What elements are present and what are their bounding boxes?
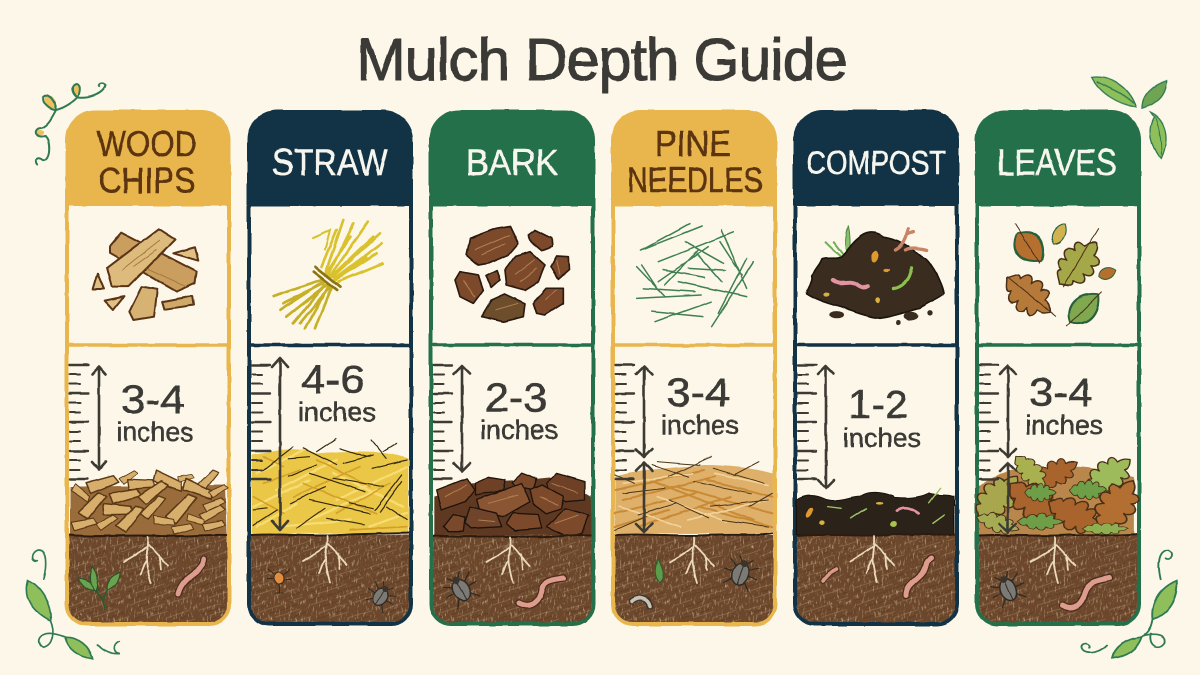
header: wood chips: CHIPS — [98, 160, 196, 201]
panel frame — [613, 130, 775, 624]
panel: straw — [247, 110, 413, 624]
decoration: top-right leaves — [1092, 77, 1167, 158]
arrow: depth 3-4 inches — [92, 366, 106, 470]
depth label: inches — [480, 415, 558, 445]
depth label — [298, 358, 376, 427]
mulch: bark layer — [434, 473, 591, 537]
soil: wood chips — [69, 535, 227, 622]
soil: pine needles — [615, 535, 773, 622]
icon: bark pieces — [455, 226, 569, 322]
soil: straw — [251, 535, 409, 622]
ruler — [616, 365, 634, 479]
header: pine needles: PINE — [655, 123, 731, 164]
icon: grey grub — [632, 598, 650, 606]
header: compost — [793, 110, 959, 206]
mulch: wood chips layer — [69, 466, 229, 535]
depth label — [661, 371, 739, 440]
decoration: top-left vine — [35, 83, 105, 165]
header: straw — [247, 110, 413, 206]
ruler — [798, 365, 816, 479]
icon: pale beetle — [362, 577, 401, 615]
header: wood chips — [65, 110, 231, 206]
panel: pine needles — [611, 110, 777, 624]
decoration: bottom-right vine — [1081, 550, 1177, 658]
panel frame — [977, 130, 1139, 624]
decoration: bottom-left vine — [27, 550, 120, 658]
ruler — [980, 365, 998, 479]
icon: beetle — [720, 552, 762, 593]
icon: earthworm — [906, 558, 931, 596]
icon: small worm — [823, 569, 837, 581]
panel: wood chips — [65, 110, 231, 624]
mulch: straw layer — [252, 439, 408, 533]
depth label: inches — [843, 423, 921, 453]
panel: bark — [429, 110, 595, 624]
panel frame — [67, 130, 229, 624]
depth label: 3-4 — [666, 371, 730, 415]
icon: earthworm — [519, 578, 563, 605]
mulch: pine needles layer — [615, 457, 773, 533]
arrow: mulch layer depth — [1000, 463, 1016, 532]
header: pine needles — [611, 110, 777, 206]
icon: earthworm — [1063, 578, 1109, 607]
ruler — [434, 365, 452, 479]
arrow: mulch layer depth — [636, 463, 652, 532]
ruler — [70, 365, 88, 479]
mulch: leaves layer — [965, 448, 1150, 542]
panel: compost — [793, 110, 959, 624]
icon: beetle — [438, 567, 483, 610]
header: leaves — [975, 110, 1141, 206]
icon: earthworm — [178, 559, 204, 594]
depth label: inches — [661, 410, 739, 440]
header: wood chips: WOOD — [97, 123, 197, 164]
depth label: 3-4 — [1029, 371, 1093, 415]
depth label: 2-3 — [485, 376, 547, 420]
depth label: inches — [298, 397, 376, 427]
soil: leaves — [979, 535, 1137, 622]
arrow: depth 2-3 inches — [454, 366, 470, 471]
header: bark — [429, 110, 595, 206]
header: pine needles: NEEDLES — [627, 161, 763, 200]
mulch: compost layer — [796, 488, 954, 535]
depth label — [480, 376, 558, 445]
arrow: upper depth — [1000, 366, 1016, 457]
icon: straw bundle — [273, 220, 383, 328]
panel frame — [431, 130, 593, 624]
panel frame — [249, 130, 411, 624]
icon: assorted leaves — [995, 221, 1118, 331]
header: bark: BARK — [466, 142, 558, 183]
icon: compost heap — [807, 225, 944, 325]
depth label: 4-6 — [301, 358, 365, 402]
depth label: 1-2 — [848, 383, 908, 427]
arrow: depth 4-6 inches — [272, 358, 288, 530]
title: Mulch Depth Guide — [356, 27, 848, 93]
panel: leaves — [965, 110, 1150, 624]
header: straw: STRAW — [272, 142, 388, 183]
depth label — [116, 378, 194, 447]
icon: wood chips — [93, 229, 198, 320]
header: leaves: LEAVES — [997, 142, 1117, 183]
depth label — [1025, 371, 1103, 440]
depth label — [843, 383, 921, 453]
panel frame — [795, 130, 957, 624]
arrow: upper depth — [636, 366, 652, 457]
icon: soil seedling — [78, 567, 120, 610]
depth label: inches — [1025, 410, 1103, 440]
icon: beetle — [986, 567, 1030, 610]
header: compost: COMPOST — [806, 144, 946, 181]
icon: pine needles — [637, 223, 753, 327]
soil: bark — [433, 535, 591, 622]
soil: compost — [797, 535, 955, 622]
icon: soil sprout — [655, 559, 663, 583]
depth label: inches — [116, 417, 194, 447]
arrow: depth 1-2 inches — [818, 366, 834, 488]
icon: orange spider — [267, 569, 291, 593]
ruler — [252, 365, 270, 479]
depth label: 3-4 — [121, 378, 185, 422]
